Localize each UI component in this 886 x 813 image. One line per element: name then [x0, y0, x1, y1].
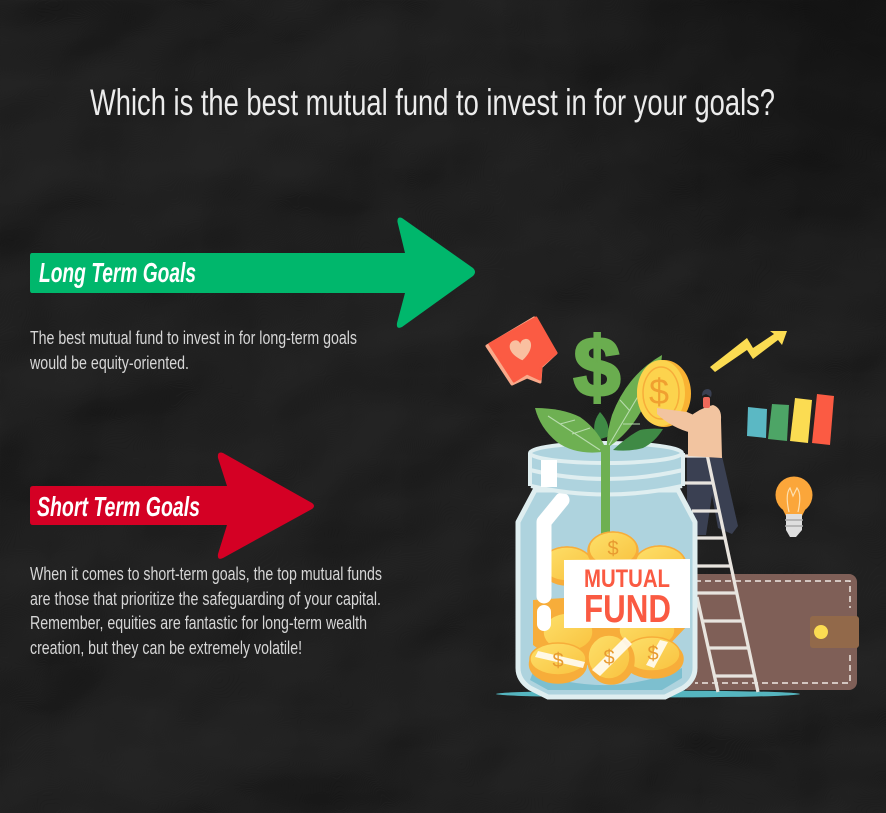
stem through lid — [601, 445, 610, 505]
panel: short term goals — [30, 453, 382, 658]
text block: long term description: would be equity-oriented. — [29, 353, 189, 373]
icon: man's legs — [687, 456, 738, 535]
icon: gold coin — [637, 360, 691, 427]
icon: gold coin: $ — [649, 371, 669, 412]
icon: glass jar — [518, 443, 695, 697]
arrow: red — [30, 453, 314, 559]
text block: short term description: are those that prioritize the safeguarding of your capital. — [30, 589, 381, 609]
heading: long term goals: Long Term Goals — [39, 257, 196, 288]
icon: wallet — [680, 574, 859, 690]
text block: short term description — [30, 564, 382, 658]
label: mutual fund: MUTUAL — [584, 565, 670, 593]
icon: heart speech bubble — [487, 318, 556, 384]
icon: light bulb — [776, 476, 812, 537]
text block: short term description: creation, but they can be extremely volatile! — [30, 638, 302, 658]
icon: bar chart — [747, 394, 834, 445]
coin dollar signs: $ — [603, 647, 615, 669]
text block: long term description: The best mutual fund to invest in for long-term goals — [30, 328, 357, 348]
arrow: green — [30, 218, 475, 328]
icon: dollar sign: $ — [574, 320, 620, 414]
coin dollar signs: $ — [552, 650, 564, 672]
illustration: mutual fund jar — [487, 318, 859, 698]
text block: long term description — [29, 328, 357, 373]
label: mutual fund: FUND — [584, 588, 671, 631]
stem inside jar — [601, 445, 610, 540]
heading: short term goals: Short Term Goals — [37, 491, 200, 522]
coin dollar signs — [552, 538, 659, 672]
ground shadow — [496, 690, 800, 698]
coin dollar signs: $ — [607, 538, 619, 560]
coin dollar signs: $ — [647, 643, 659, 665]
icon: leaves — [535, 355, 663, 453]
panel: long term goals — [29, 218, 475, 373]
coins in jar — [530, 532, 688, 684]
jar highlight — [544, 500, 562, 596]
jar lid — [530, 443, 683, 495]
label: mutual fund — [564, 559, 690, 631]
coin highlights — [535, 637, 668, 676]
text block: short term description: When it comes to short-term goals, the top mutual funds — [30, 564, 382, 584]
icon: yellow trend arrow — [710, 331, 787, 372]
icon: man upper body — [657, 389, 722, 458]
icon: ladder — [685, 445, 758, 692]
text block: short term description: Remember, equities are fantastic for long-term wealth — [30, 613, 367, 633]
teal shadow at jar bottom — [530, 668, 682, 690]
